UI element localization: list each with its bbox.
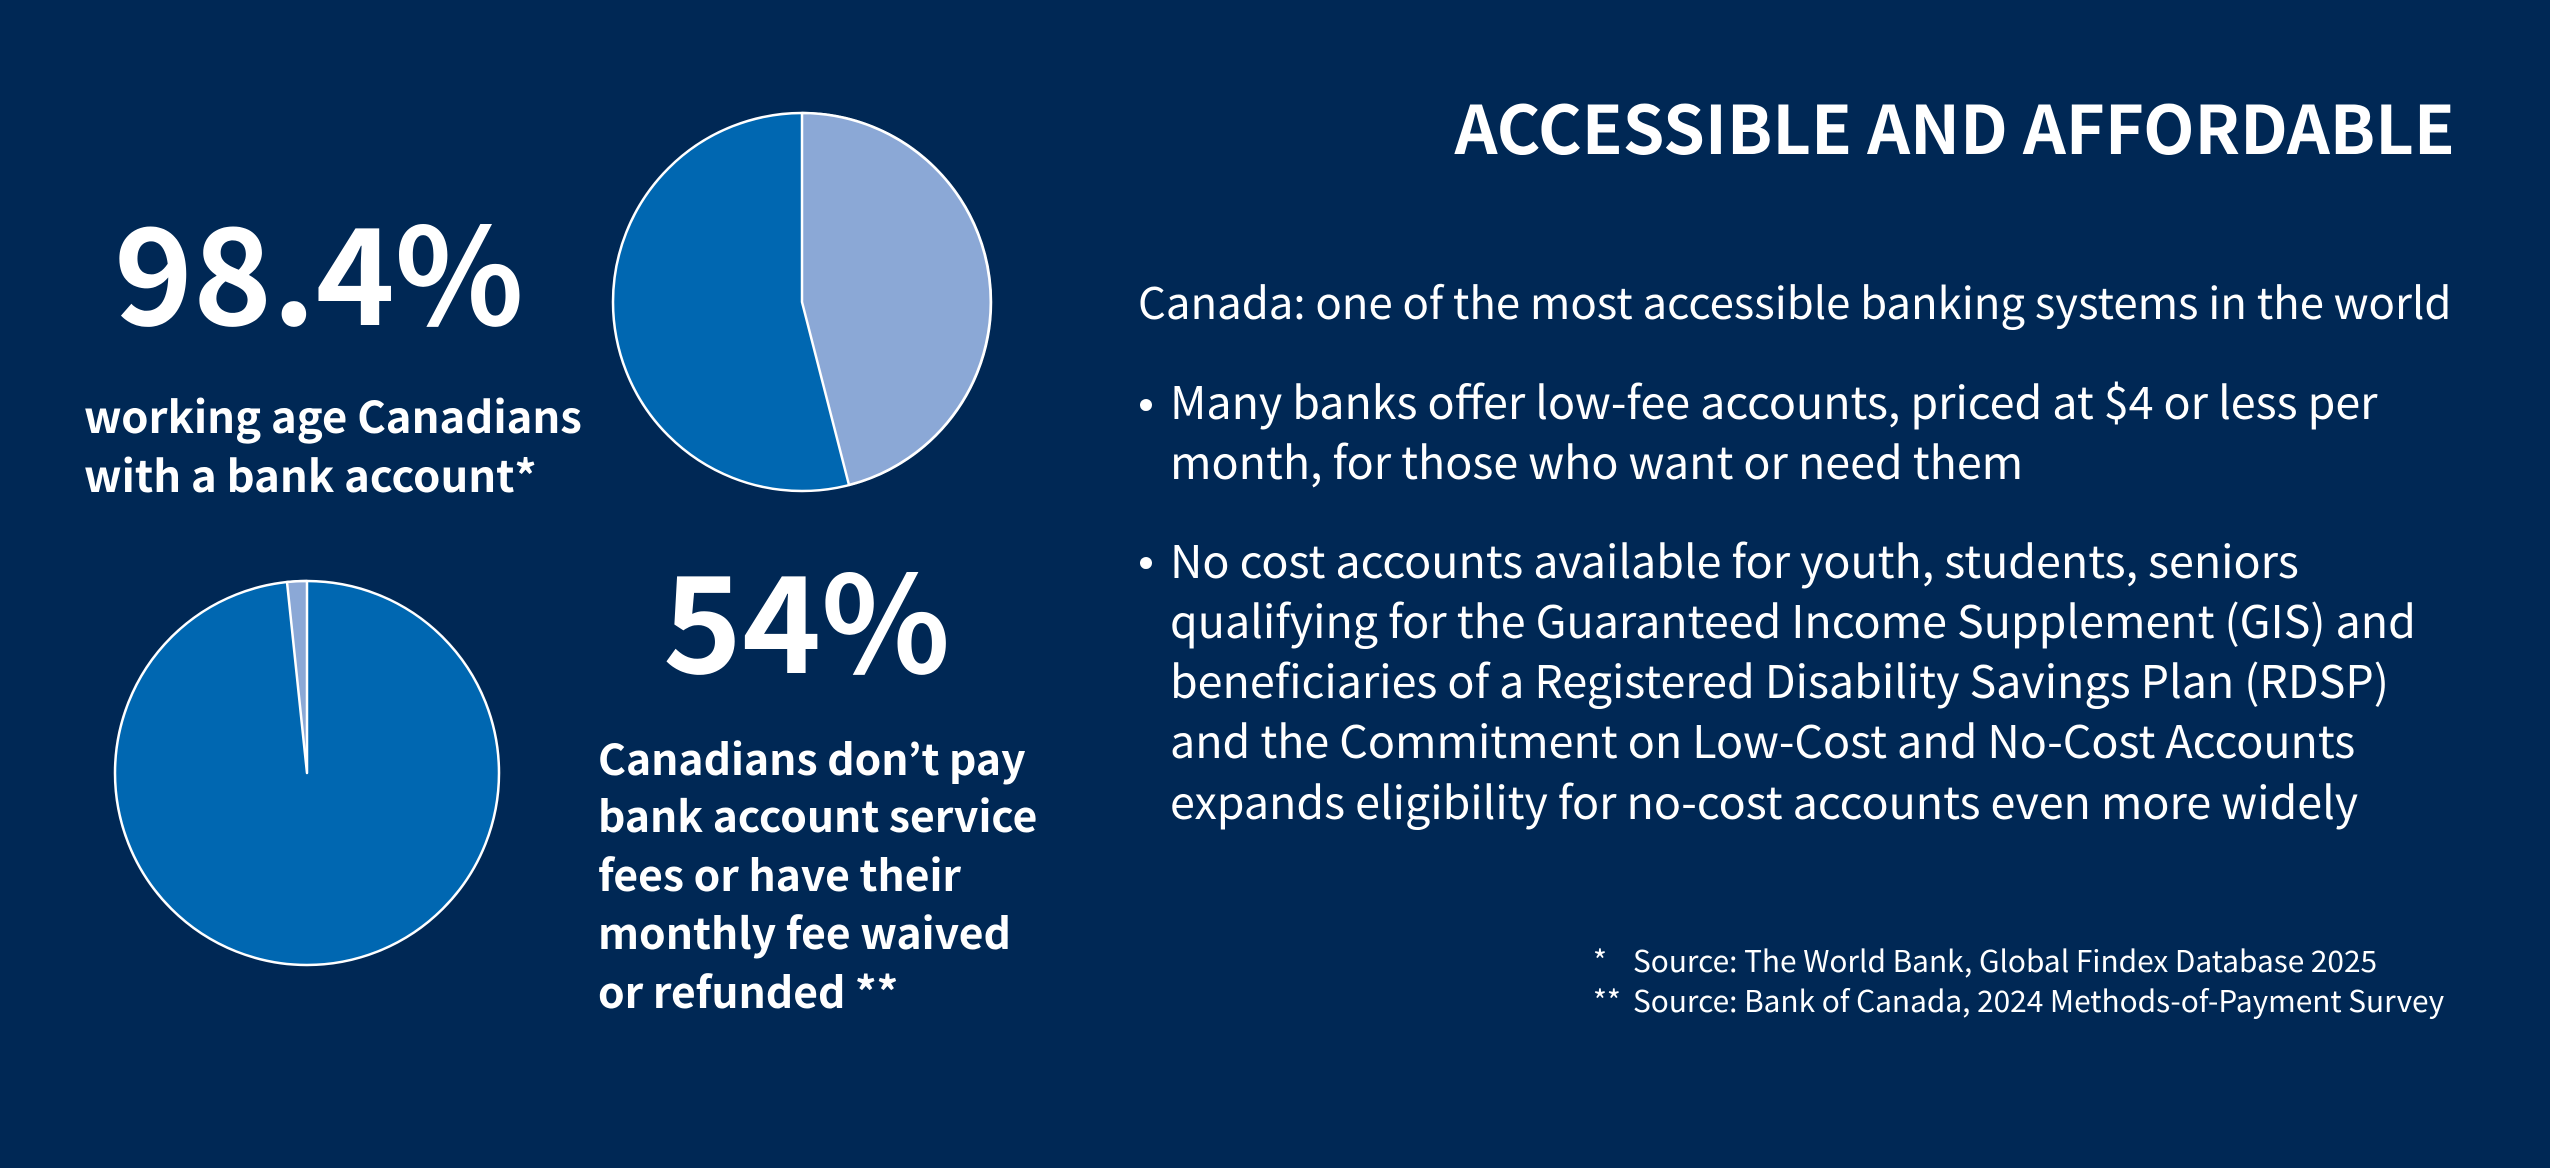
footnotes: sources: * xyxy=(1593,937,1607,981)
bullet: low-fee accounts: month, for those who want or need them xyxy=(1170,427,2023,492)
bullet: no cost accounts: qualifying for the Guaranteed Income Supplement (GIS) and xyxy=(1170,586,2416,651)
bullet: no cost accounts: No cost accounts available for youth, students, seniors xyxy=(1170,526,2299,591)
statistic: 98.4%: 98.4% xyxy=(114,170,524,364)
statistic caption: bank account xyxy=(84,382,582,505)
bullet: no cost accounts: and the Commitment on Low-Cost and No-Cost Accounts xyxy=(1170,706,2355,771)
bullet: no cost accounts: expands eligibility for no-cost accounts even more widely xyxy=(1170,767,2358,832)
statistic caption: service fees: Canadians don’t pay xyxy=(598,727,1026,788)
bullet: low-fee accounts xyxy=(1140,367,2378,492)
statistic caption: bank account: working age Canadians xyxy=(84,382,582,446)
title: ACCESSIBLE AND AFFORDABLE xyxy=(1454,78,2455,174)
statistic caption: service fees: bank account service xyxy=(598,784,1037,845)
statistic caption: bank account: with a bank account* xyxy=(84,441,537,505)
footnotes: sources: ** xyxy=(1593,977,1621,1021)
bullet: no cost accounts: beneficiaries of a Registered Disability Savings Plan (RDSP) xyxy=(1170,646,2389,711)
statistic caption: service fees: or refunded ** xyxy=(598,960,898,1021)
footnotes: sources xyxy=(1593,937,2445,1021)
statistic: 54%: 54% xyxy=(663,518,950,712)
footnotes: sources: Source: The World Bank, Global Findex Database 2025 xyxy=(1633,937,2377,981)
footnotes: sources: Source: Bank of Canada, 2024 Methods-of-Payment Survey xyxy=(1633,977,2445,1021)
statistic caption: service fees xyxy=(598,727,1037,1021)
intro text: Canada: one of the most accessible banking systems in the world xyxy=(1138,268,2451,332)
statistic caption: service fees: monthly fee waived xyxy=(598,901,1011,962)
bullet: low-fee accounts: Many banks offer low-fee accounts, priced at $4 or less per xyxy=(1170,367,2378,432)
pie chart: 54% pay no fees xyxy=(115,581,499,965)
statistic caption: service fees: fees or have their xyxy=(598,843,961,904)
pie chart: 98.4% with a bank account xyxy=(613,113,991,491)
bullet: no cost accounts xyxy=(1140,526,2416,832)
